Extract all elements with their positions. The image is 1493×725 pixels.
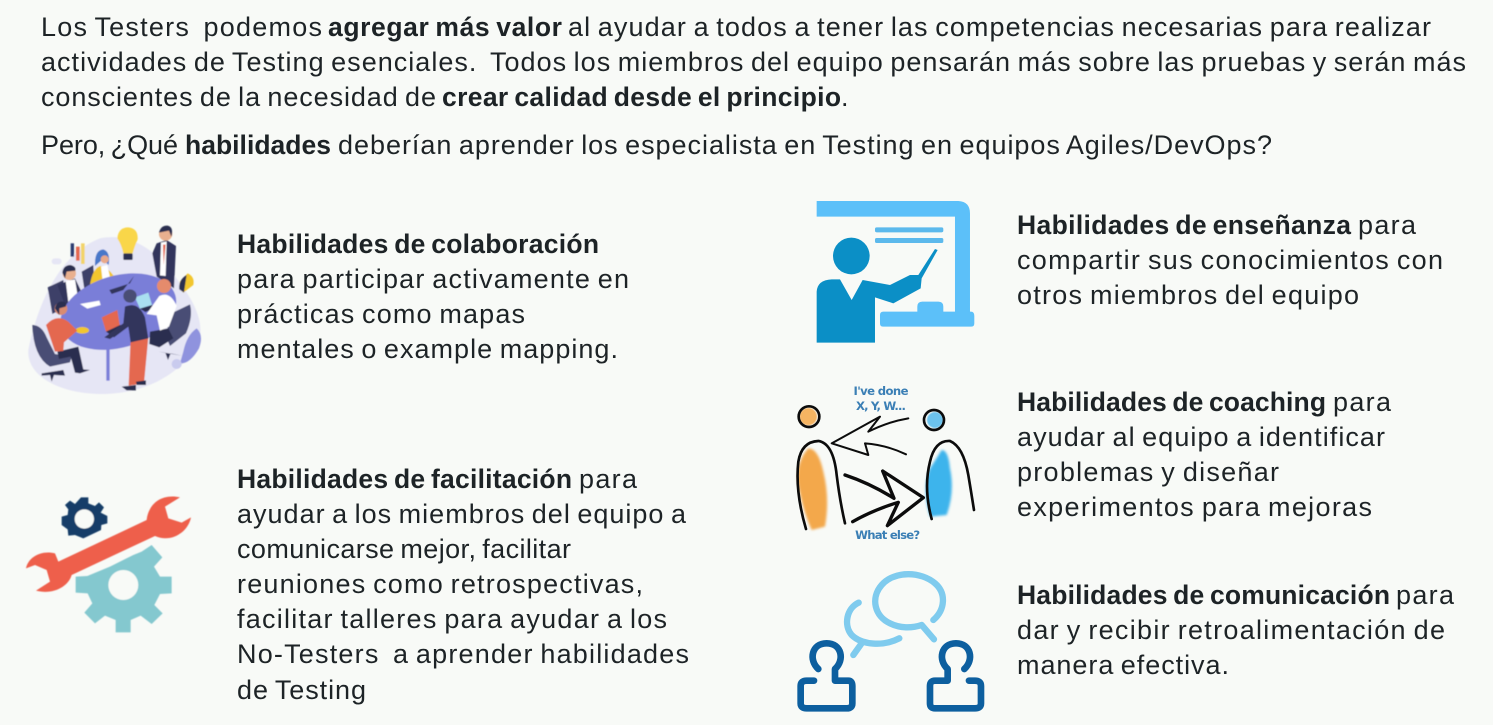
panel: comunicación: [801, 574, 1455, 708]
panel: facilitación: [26, 464, 689, 705]
intro paragraph: crear calidad desde el principio: [442, 82, 841, 112]
intro paragraph: conscientes de la necesidad de: [41, 82, 436, 112]
text: comunicación: Habilidades de comunicación: [1017, 580, 1390, 610]
text: comunicación: para: [1396, 580, 1455, 610]
right man and laptop: [166, 304, 191, 346]
icon: two people with speech bubbles: [801, 574, 981, 708]
center standing man and laptop: [102, 310, 120, 332]
panel: colaboración: [28, 226, 629, 394]
text: facilitación: reuniones como retrospectivas,: [237, 569, 643, 599]
intro paragraph: [41, 12, 1466, 112]
panel: enseñanza: [817, 201, 1443, 343]
text: colaboración: prácticas como mapas: [237, 299, 525, 329]
bulb and chart: [117, 227, 138, 253]
intro paragraph: al ayudar a todos a tener las competencias necesarias para realizar: [568, 12, 1431, 42]
text: facilitación: para: [579, 464, 638, 494]
text: comunicación: dar y recibir retroalimentación de: [1017, 615, 1445, 645]
intro paragraph: agregar más valor: [328, 12, 562, 42]
icon: wrench and gears: [26, 497, 191, 632]
text: enseñanza: [1017, 210, 1443, 310]
text: enseñanza: otros miembros del equipo: [1017, 280, 1359, 310]
question heading: habilidades: [185, 130, 331, 160]
icon: team meeting around a table: [28, 226, 201, 394]
text: colaboración: [237, 229, 629, 364]
text: facilitación: [237, 464, 689, 705]
text: comunicación: manera efectiva.: [1017, 650, 1229, 680]
woman and blazer man behind the table: [82, 265, 95, 293]
text: enseñanza: Habilidades de enseñanza: [1017, 210, 1351, 240]
icon: teacher at a board: [817, 201, 974, 343]
text: coaching: [1017, 387, 1392, 522]
text: coaching: para: [1333, 387, 1392, 417]
table: [106, 343, 110, 381]
text: enseñanza: para: [1358, 210, 1417, 240]
icon: two figures exchanging arrows: [797, 384, 974, 542]
icon: two figures exchanging arrows: X, Y, W...: [856, 399, 906, 413]
icon: two figures exchanging arrows: What else?: [855, 528, 920, 542]
panel: coaching: [797, 384, 1392, 542]
text: colaboración: para participar activamente en: [237, 264, 629, 294]
question heading: deberían aprender los especialista en Testing en equipos Agiles/DevOps?: [338, 130, 1272, 160]
text: facilitación: de Testing: [237, 675, 366, 705]
text: coaching: ayudar al equipo a identificar: [1017, 422, 1385, 452]
text: comunicación: [1017, 580, 1455, 680]
question heading: Pero, ¿Qué: [41, 130, 178, 160]
text: facilitación: facilitar talleres para ayudar a los: [237, 604, 667, 634]
text: coaching: experimentos para mejoras: [1017, 492, 1372, 522]
intro paragraph: .: [841, 82, 849, 112]
intro paragraph: Los Testers podemos: [41, 12, 322, 42]
plant: [180, 328, 201, 363]
text: facilitación: ayudar a los miembros del equipo a: [237, 499, 687, 529]
standing man: [152, 240, 176, 288]
intro paragraph: actividades de Testing esenciales. Todos los miembros del equipo pensarán más sobre las pruebas y serán más: [41, 47, 1466, 77]
text: colaboración: Habilidades de colaboración: [237, 229, 599, 259]
text: facilitación: Habilidades de facilitación: [237, 464, 572, 494]
text: colaboración: mentales o example mapping.: [237, 334, 618, 364]
text: enseñanza: compartir sus conocimientos con: [1017, 245, 1443, 275]
text: facilitación: No-Testers a aprender habilidades: [237, 639, 689, 669]
icon: two figures exchanging arrows: I've done: [853, 384, 909, 398]
red man and chair: [32, 325, 72, 367]
text: coaching: problemas y diseñar: [1017, 457, 1279, 487]
text: coaching: Habilidades de coaching: [1017, 387, 1326, 417]
text: facilitación: comunicarse mejor, facilitar: [237, 534, 571, 564]
